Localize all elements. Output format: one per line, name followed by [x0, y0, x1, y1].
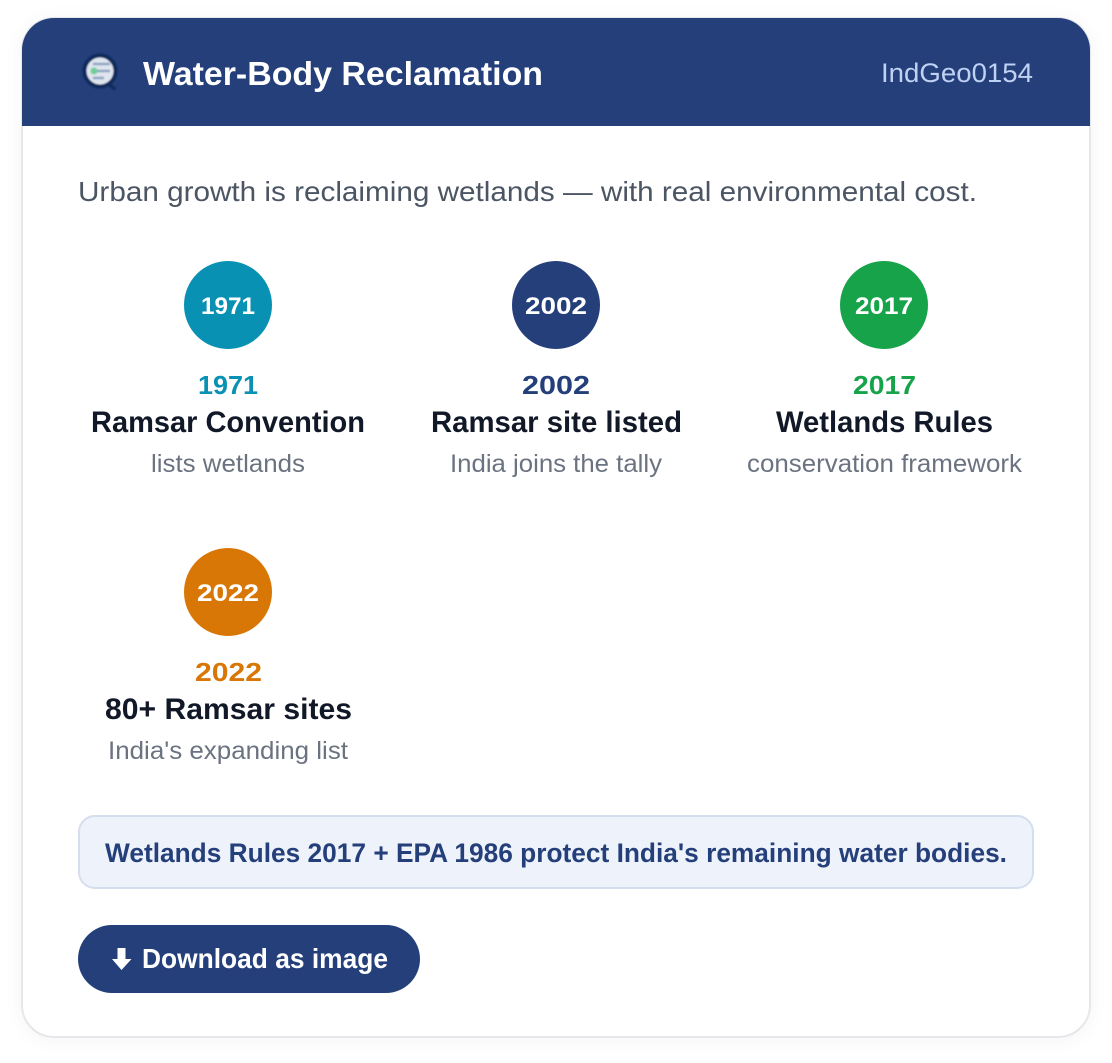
milestone: 2017: [747, 261, 1023, 478]
milestone: 2022: 2022: [197, 580, 259, 607]
button: download: Download as image: [142, 943, 388, 974]
milestone: 2022: 2022: [195, 657, 262, 687]
milestone: 1971: lists wetlands: [151, 450, 305, 478]
milestone: 2002: India joins the tally: [450, 450, 663, 478]
milestone: 2017: 2017: [855, 293, 913, 320]
milestone: 2002: [431, 261, 682, 478]
milestone: 2017: Wetlands Rules: [776, 406, 993, 439]
milestone: 1971: [91, 261, 365, 478]
panel: header: [22, 18, 1090, 126]
milestone: 1971: Ramsar Convention: [91, 406, 365, 439]
milestone: 1971: 1971: [201, 293, 255, 320]
milestone: 2017: 2017: [853, 370, 916, 400]
text: intro: Urban growth is reclaiming wetlands — with real environmental cost.: [78, 176, 977, 207]
milestone: 2002: 2002: [522, 370, 590, 400]
milestone: 2022: India's expanding list: [108, 737, 348, 765]
milestone: 2022: 80+ Ramsar sites: [105, 693, 352, 726]
callout: Wetlands Rules 2017 + EPA 1986 protect India's remaining water bodies.: [105, 838, 1007, 868]
icon: checklist magnifier: [84, 56, 116, 89]
button: download: [78, 925, 420, 993]
milestone: 2022: [105, 548, 352, 765]
milestone: 1971: 1971: [198, 370, 258, 400]
milestone: 2017: conservation framework: [747, 450, 1023, 478]
callout: [79, 816, 1033, 888]
milestone: 2002: Ramsar site listed: [431, 406, 682, 439]
heading: title: Water-Body Reclamation: [143, 55, 543, 92]
icon: down arrow: [112, 948, 132, 970]
text: code: IndGeo0154: [881, 58, 1033, 88]
milestone: 2002: 2002: [525, 293, 587, 320]
